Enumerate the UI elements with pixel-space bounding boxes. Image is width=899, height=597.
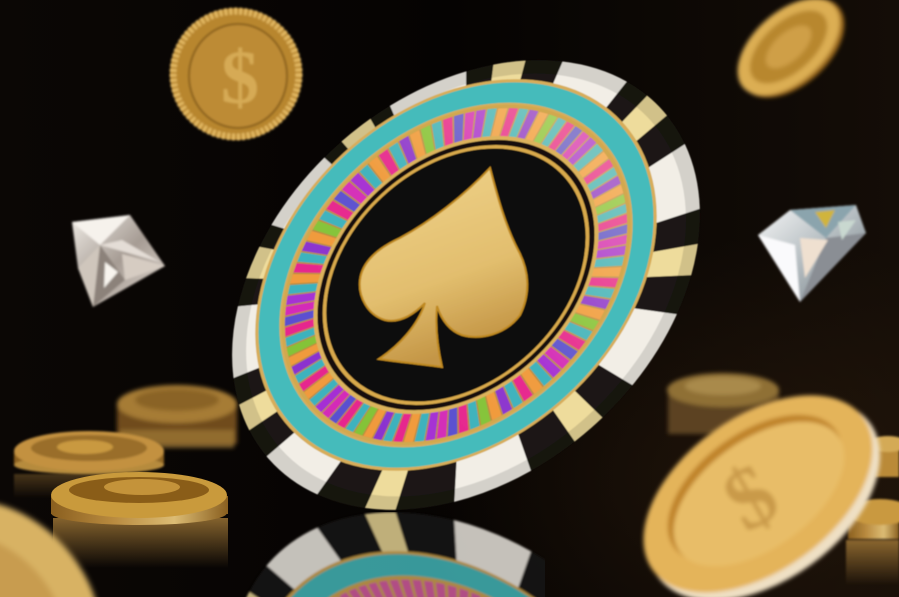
coin: large foreground right bbox=[608, 355, 899, 597]
spade bbox=[360, 168, 527, 367]
gold ring bbox=[214, 36, 698, 514]
coin: front left bbox=[51, 472, 228, 568]
coin reflection bbox=[53, 518, 228, 568]
rainbow segment ring bbox=[240, 62, 672, 488]
chip rim: white, black and cream stripes bbox=[143, 0, 789, 597]
coins: right edge small bbox=[846, 436, 899, 585]
coin: bottom left foreground bbox=[0, 500, 100, 597]
diamond: left bbox=[72, 215, 165, 307]
teal band bbox=[196, 19, 716, 531]
chip reflection bbox=[245, 512, 545, 597]
diamond: right bbox=[758, 205, 866, 302]
coin: back right blurred stack bbox=[667, 373, 779, 434]
coin: top right tilted bbox=[720, 0, 863, 117]
chip face bbox=[177, 0, 735, 550]
inner black medallion bbox=[261, 82, 651, 468]
coin: top blurred bbox=[170, 8, 302, 140]
coin: top blurred: $ bbox=[221, 36, 259, 120]
inner gold ring bbox=[273, 95, 639, 455]
poker chip bbox=[143, 0, 789, 597]
coins: back left blurred stack bbox=[117, 385, 237, 448]
coin: large foreground right: $ bbox=[707, 445, 794, 551]
coin: middle left bbox=[14, 431, 164, 498]
